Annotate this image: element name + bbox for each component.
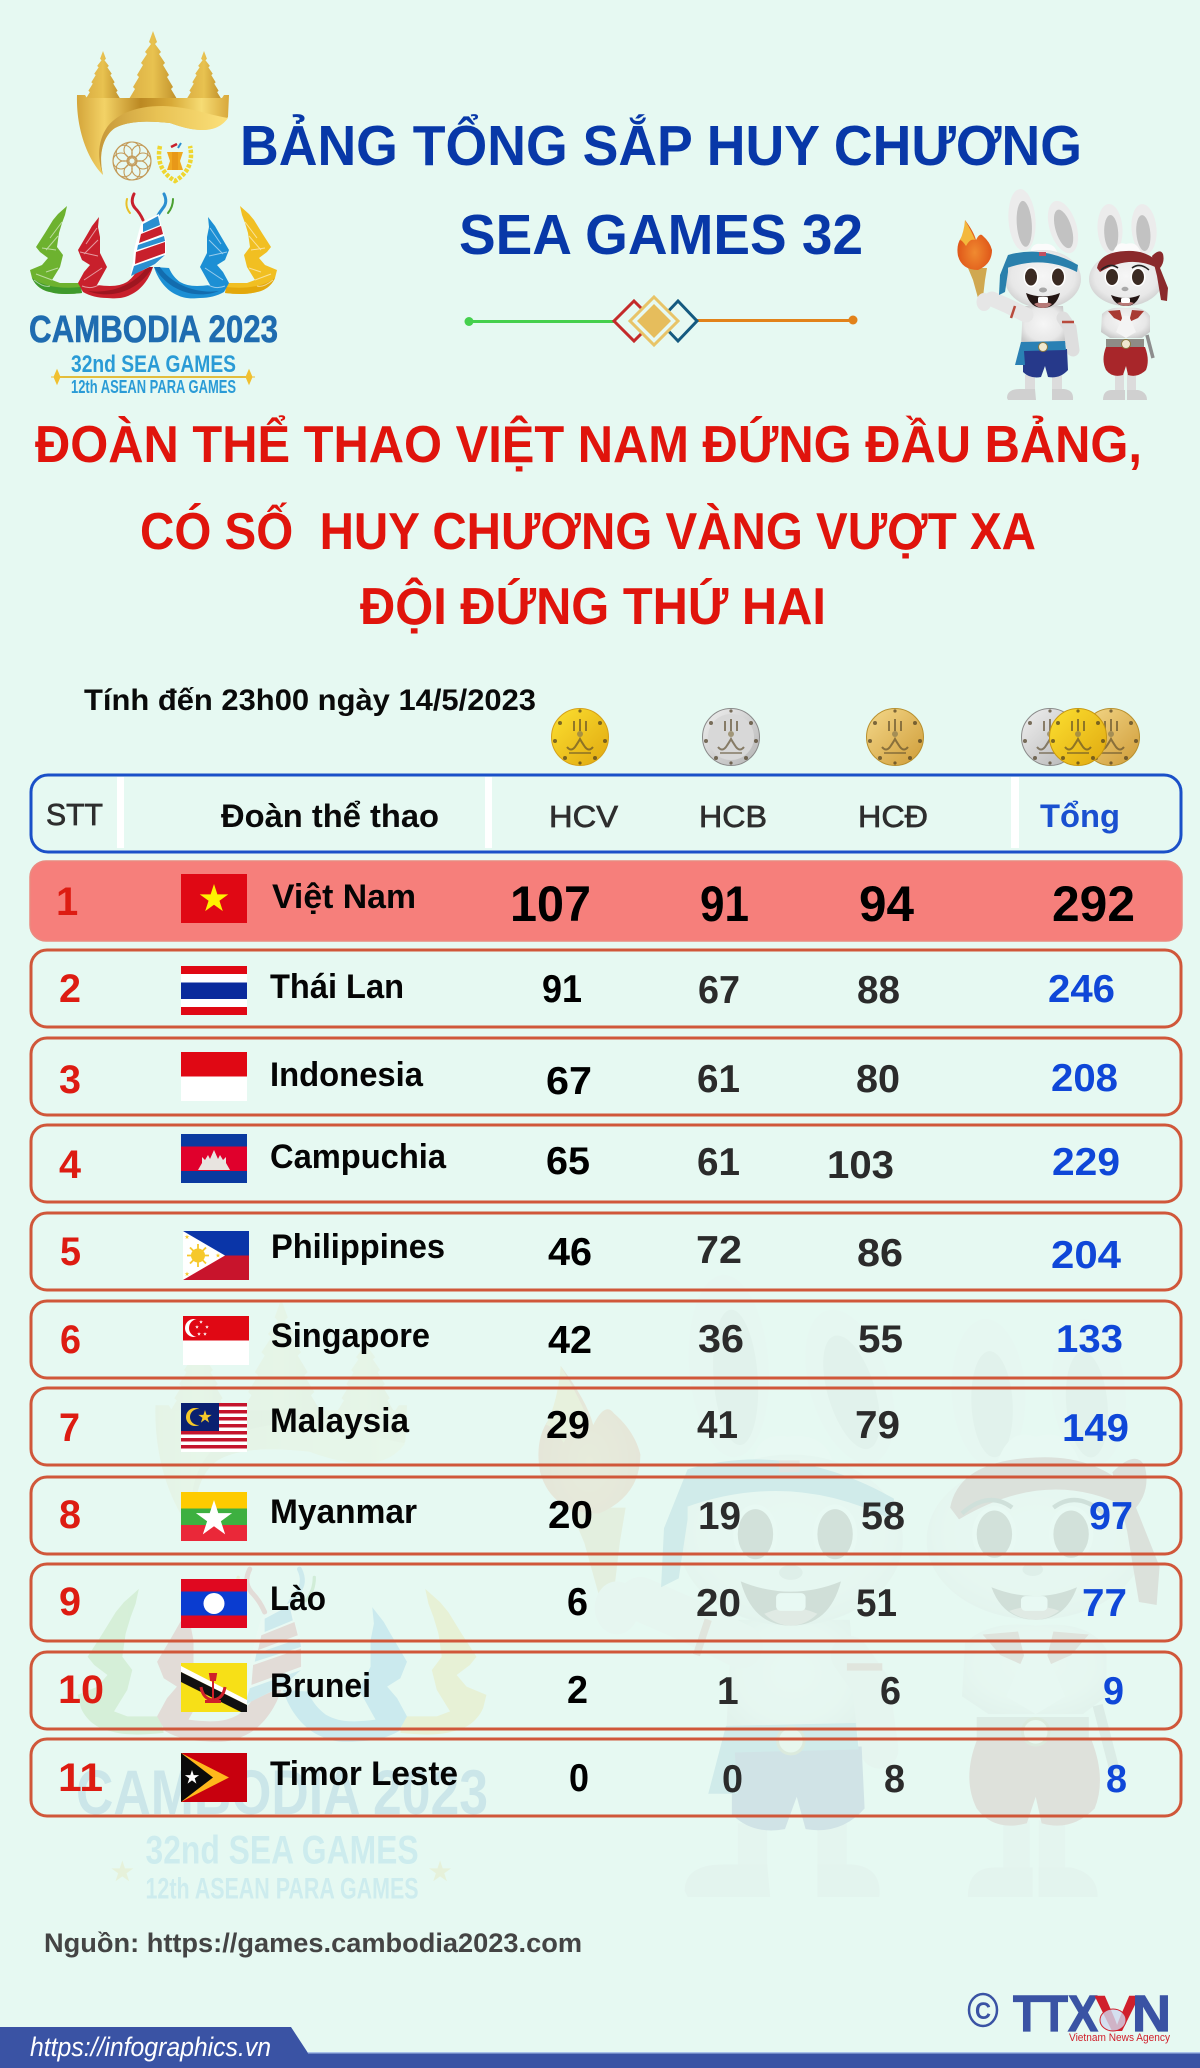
icon: four naga serpents bbox=[30, 194, 277, 298]
flag: Vietnam bbox=[181, 874, 247, 923]
logo: Cambodia 2023 SEA Games bbox=[29, 31, 278, 397]
row 8: Myanmar: 8 bbox=[59, 1493, 81, 1537]
row 4: Campuchia: 103 bbox=[827, 1144, 894, 1187]
row 7: Malaysia: 7 bbox=[59, 1406, 80, 1450]
header: HCĐ: HCĐ bbox=[858, 799, 928, 834]
row 6: Singapore: 42 bbox=[548, 1319, 592, 1362]
flag: Laos bbox=[181, 1579, 247, 1628]
flag: Myanmar bbox=[181, 1492, 247, 1541]
row 2: Thái Lan: Thái Lan bbox=[270, 968, 404, 1006]
row 7: Malaysia: 29 bbox=[546, 1404, 590, 1447]
title line 1: BẢNG TỔNG SẮP HUY CHƯƠNG bbox=[240, 113, 1082, 178]
row 9: Lào: 6 bbox=[567, 1581, 588, 1624]
row 2: Thái Lan: 246 bbox=[1048, 968, 1115, 1011]
row 2: Thái Lan: 91 bbox=[542, 968, 582, 1011]
icon: three medals total bbox=[1022, 708, 1140, 766]
row 11: Timor Leste bbox=[31, 1739, 1181, 1816]
row 11: Timor Leste: Timor Leste bbox=[270, 1755, 458, 1793]
icon: copyright: C bbox=[975, 1998, 991, 2025]
row 6: Singapore: 36 bbox=[698, 1318, 744, 1361]
logo text: 12th ASEAN Para Games: 12th ASEAN PARA GAMES bbox=[71, 377, 236, 397]
logo text: Cambodia 2023: CAMBODIA 2023 bbox=[29, 309, 278, 351]
row 4: Campuchia: Campuchia bbox=[270, 1138, 447, 1176]
row 4: Campuchia: 4 bbox=[59, 1143, 82, 1187]
subtitle line 3: ĐỘI ĐỨNG THỨ HAI bbox=[360, 577, 826, 636]
date note: Tính đến 23h00 ngày 14/5/2023 bbox=[84, 684, 536, 717]
icon: gold medal bbox=[552, 708, 608, 766]
watermark: Cambodia 2023 logo bbox=[76, 1299, 488, 1905]
row 3: Indonesia: Indonesia bbox=[270, 1056, 424, 1094]
row 3: Indonesia: 67 bbox=[546, 1060, 592, 1103]
row 10: Brunei: 6 bbox=[880, 1670, 901, 1713]
header: HCB: HCB bbox=[699, 799, 767, 834]
header: total: Tổng bbox=[1040, 798, 1120, 834]
row 9: Lào: 9 bbox=[59, 1580, 81, 1624]
header: STT: STT bbox=[46, 797, 103, 832]
logo text: 32nd SEA Games: 32nd SEA GAMES bbox=[71, 351, 236, 378]
mascots bbox=[957, 188, 1168, 400]
row 6: Singapore: 6 bbox=[60, 1318, 81, 1362]
row 2: Thái Lan: 67 bbox=[698, 969, 740, 1012]
row 6: Singapore: Singapore bbox=[271, 1317, 430, 1355]
icon: golden crown bbox=[77, 31, 229, 175]
row 5: Philippines: 204 bbox=[1051, 1234, 1121, 1277]
row 4: Campuchia: 61 bbox=[697, 1141, 740, 1184]
row 9: Lào: 51 bbox=[856, 1582, 897, 1625]
row 1: Việt Nam: 91 bbox=[700, 876, 749, 932]
row 7: Malaysia: Malaysia bbox=[270, 1402, 410, 1440]
watermark: mascots bbox=[538, 1272, 1160, 1897]
TTXVN logo bbox=[969, 1985, 1171, 2044]
source note: Nguồn: https://games.cambodia2023.com bbox=[44, 1928, 582, 1958]
watermark: Cambodia 2023 logo: 32nd SEA GAMES bbox=[146, 1829, 419, 1873]
row 3: Indonesia: 61 bbox=[697, 1058, 740, 1101]
icon: copyright bbox=[969, 1994, 997, 2026]
icon: silver medal bbox=[702, 708, 760, 766]
row 9: Lào: Lào bbox=[270, 1580, 326, 1618]
row 3: Indonesia bbox=[31, 1038, 1181, 1115]
row 10: Brunei: 9 bbox=[1103, 1670, 1124, 1713]
row 5: Philippines: 72 bbox=[696, 1229, 742, 1272]
flag: Philippines bbox=[183, 1231, 249, 1280]
row 11: Timor Leste: 0 bbox=[569, 1757, 589, 1800]
row 1: Việt Nam: Việt Nam bbox=[272, 878, 416, 916]
agency wordmark bbox=[1013, 1985, 1171, 2042]
row 10: Brunei: 1 bbox=[717, 1670, 739, 1713]
watermark: Cambodia 2023 logo: CAMBODIA 2023 bbox=[76, 1758, 488, 1828]
icon: bronze medal bbox=[866, 708, 924, 766]
row 5: Philippines: 86 bbox=[857, 1232, 903, 1275]
divider ornament bbox=[464, 297, 858, 345]
row 10: Brunei: 2 bbox=[567, 1669, 588, 1712]
row 7: Malaysia bbox=[31, 1388, 1181, 1465]
subtitle line 1: ĐOÀN THỂ THAO VIỆT NAM ĐỨNG ĐẦU BẢNG, bbox=[35, 415, 1142, 474]
header: HCV: HCV bbox=[549, 799, 618, 834]
mascot: female rabbit bbox=[1089, 203, 1168, 400]
row 4: Campuchia: 229 bbox=[1052, 1141, 1120, 1184]
flag: Cambodia bbox=[181, 1134, 247, 1183]
row 10: Brunei: 10 bbox=[58, 1668, 104, 1712]
row 5: Philippines: Philippines bbox=[271, 1228, 445, 1266]
flag: Malaysia bbox=[181, 1403, 247, 1452]
agency wordmark: TTX bbox=[1013, 1985, 1098, 2042]
flag: Indonesia bbox=[181, 1052, 247, 1101]
header: delegation: Đoàn thể thao bbox=[221, 798, 439, 834]
row 3: Indonesia: 3 bbox=[59, 1058, 81, 1102]
row 8: Myanmar: 19 bbox=[698, 1495, 741, 1538]
row 1: Việt Nam bbox=[30, 861, 1182, 941]
row 4: Campuchia: 65 bbox=[546, 1140, 590, 1183]
row 3: Indonesia: 80 bbox=[856, 1058, 900, 1101]
watermark: Cambodia 2023 logo: 12th ASEAN PARA GAMES bbox=[146, 1872, 419, 1905]
table header bbox=[31, 775, 1181, 852]
row 8: Myanmar: 97 bbox=[1089, 1495, 1133, 1538]
footer bar bbox=[0, 2027, 1200, 2068]
icon: ASEAN emblem bbox=[159, 143, 191, 181]
logo ornament line bbox=[51, 370, 255, 384]
title bbox=[240, 113, 1082, 267]
row 5: Philippines bbox=[31, 1213, 1181, 1290]
row 2: Thái Lan: 88 bbox=[857, 969, 900, 1012]
row 1: Việt Nam: 107 bbox=[510, 876, 591, 932]
row 1: Việt Nam: 292 bbox=[1052, 876, 1135, 932]
row 10: Brunei bbox=[31, 1652, 1181, 1729]
footer URL: https://infographics.vn bbox=[30, 2032, 271, 2062]
row 4: Campuchia bbox=[31, 1125, 1181, 1202]
row 9: Lào bbox=[31, 1564, 1181, 1641]
row 1: Việt Nam: 94 bbox=[859, 876, 914, 932]
row 11: Timor Leste: 8 bbox=[1106, 1758, 1127, 1801]
row 10: Brunei: Brunei bbox=[270, 1667, 371, 1705]
row 8: Myanmar bbox=[31, 1477, 1181, 1554]
row 11: Timor Leste: 8 bbox=[884, 1758, 905, 1801]
row 11: Timor Leste: 11 bbox=[58, 1756, 103, 1800]
flag: Brunei bbox=[181, 1663, 247, 1712]
row 9: Lào: 77 bbox=[1082, 1582, 1127, 1625]
row 7: Malaysia: 79 bbox=[855, 1404, 900, 1447]
subtitle heading bbox=[35, 415, 1142, 636]
row 8: Myanmar: 58 bbox=[861, 1495, 905, 1538]
flag: Thailand bbox=[181, 966, 247, 1015]
row 5: Philippines: 46 bbox=[548, 1231, 592, 1274]
row 9: Lào: 20 bbox=[696, 1582, 741, 1625]
row 7: Malaysia: 149 bbox=[1062, 1407, 1129, 1450]
agency wordmark: N bbox=[1132, 1985, 1171, 2042]
row 6: Singapore: 133 bbox=[1056, 1318, 1123, 1361]
row 3: Indonesia: 208 bbox=[1051, 1057, 1118, 1100]
row 6: Singapore bbox=[31, 1301, 1181, 1378]
row 8: Myanmar: Myanmar bbox=[270, 1493, 417, 1531]
row 7: Malaysia: 41 bbox=[697, 1404, 738, 1447]
flag: Singapore bbox=[183, 1316, 249, 1365]
row 5: Philippines: 5 bbox=[60, 1230, 81, 1274]
row 8: Myanmar: 20 bbox=[548, 1494, 593, 1537]
row 6: Singapore: 55 bbox=[858, 1318, 903, 1361]
row 1: Việt Nam: 1 bbox=[56, 880, 78, 924]
row 11: Timor Leste: 0 bbox=[722, 1758, 743, 1801]
flag: Timor Leste bbox=[181, 1753, 247, 1802]
agency tagline: Vietnam News Agency bbox=[1069, 2032, 1170, 2044]
subtitle line 2: CÓ SỐ HUY CHƯƠNG VÀNG VƯỢT XA bbox=[140, 502, 1036, 561]
row 2: Thái Lan: 2 bbox=[59, 967, 81, 1011]
title line 2: SEA GAMES 32 bbox=[459, 203, 863, 267]
agency wordmark: V bbox=[1094, 1985, 1140, 2042]
icon: lotus ring symbol bbox=[113, 142, 151, 180]
mascot: male rabbit with torch bbox=[957, 188, 1084, 400]
row 2: Thái Lan bbox=[31, 950, 1181, 1027]
